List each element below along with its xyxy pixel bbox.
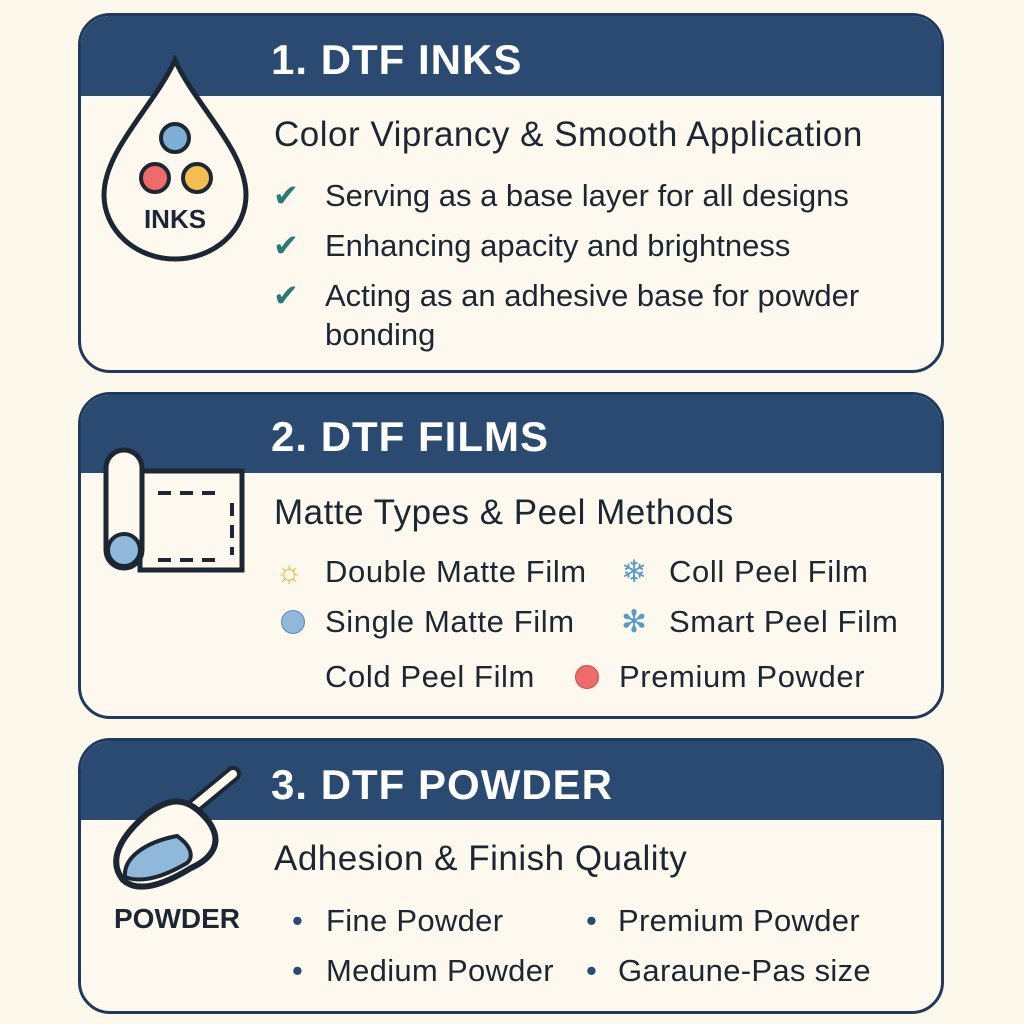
list: film types: Cold Peel Film bbox=[325, 659, 535, 694]
list: powder types: Medium Powder bbox=[326, 953, 554, 988]
list: film types: Premium Powder bbox=[619, 659, 865, 694]
list: film types: ☼ bbox=[275, 554, 303, 589]
list: inks checks: Acting as an adhesive base for powder bbox=[325, 278, 859, 313]
list: powder types: Garaune-Pas size bbox=[618, 953, 871, 988]
list: powder types: Premium Powder bbox=[618, 903, 860, 938]
panel: films bbox=[78, 392, 944, 719]
list: powder types: • bbox=[292, 903, 303, 938]
panel: powder bbox=[78, 738, 944, 1014]
subtitle: inks: Color Viprancy & Smooth Application bbox=[274, 115, 863, 154]
list: inks checks: Enhancing apacity and brightness bbox=[325, 228, 790, 263]
list: inks checks: ✔ bbox=[273, 228, 299, 263]
list: inks checks: bonding bbox=[325, 317, 435, 352]
panel: inks bbox=[78, 13, 944, 373]
list: powder types: • bbox=[292, 953, 303, 988]
list: film types: Double Matte Film bbox=[325, 554, 587, 589]
icon: powder scoop: POWDER bbox=[114, 903, 240, 934]
list: film types: ❄ bbox=[621, 554, 647, 589]
list: film types: Coll Peel Film bbox=[669, 554, 869, 589]
list: powder types: • bbox=[586, 953, 597, 988]
list: powder types: Fine Powder bbox=[326, 903, 503, 938]
list: film types: Single Matte Film bbox=[325, 604, 575, 639]
title: DTF powder: 3. DTF POWDER bbox=[271, 761, 613, 808]
title: DTF films: 2. DTF FILMS bbox=[271, 413, 549, 460]
list: film types bbox=[275, 554, 898, 694]
list: powder types: • bbox=[586, 903, 597, 938]
list: inks checks: ✔ bbox=[273, 278, 299, 313]
icon: powder scoop bbox=[113, 766, 241, 934]
subtitle: powder: Adhesion & Finish Quality bbox=[274, 839, 687, 878]
icon: ink drop: INKS bbox=[144, 204, 206, 234]
list: powder types bbox=[292, 903, 871, 988]
list: inks checks: ✔ bbox=[273, 178, 299, 213]
title: DTF inks: 1. DTF INKS bbox=[271, 36, 522, 83]
list: inks checks: Serving as a base layer for all designs bbox=[325, 178, 849, 213]
list: film types: Smart Peel Film bbox=[669, 604, 898, 639]
list: film types: ✻ bbox=[621, 604, 647, 639]
list: inks checks bbox=[273, 178, 859, 352]
subtitle: films: Matte Types & Peel Methods bbox=[274, 493, 734, 532]
icon: film roll bbox=[104, 448, 244, 572]
icon: ink drop bbox=[102, 55, 248, 262]
